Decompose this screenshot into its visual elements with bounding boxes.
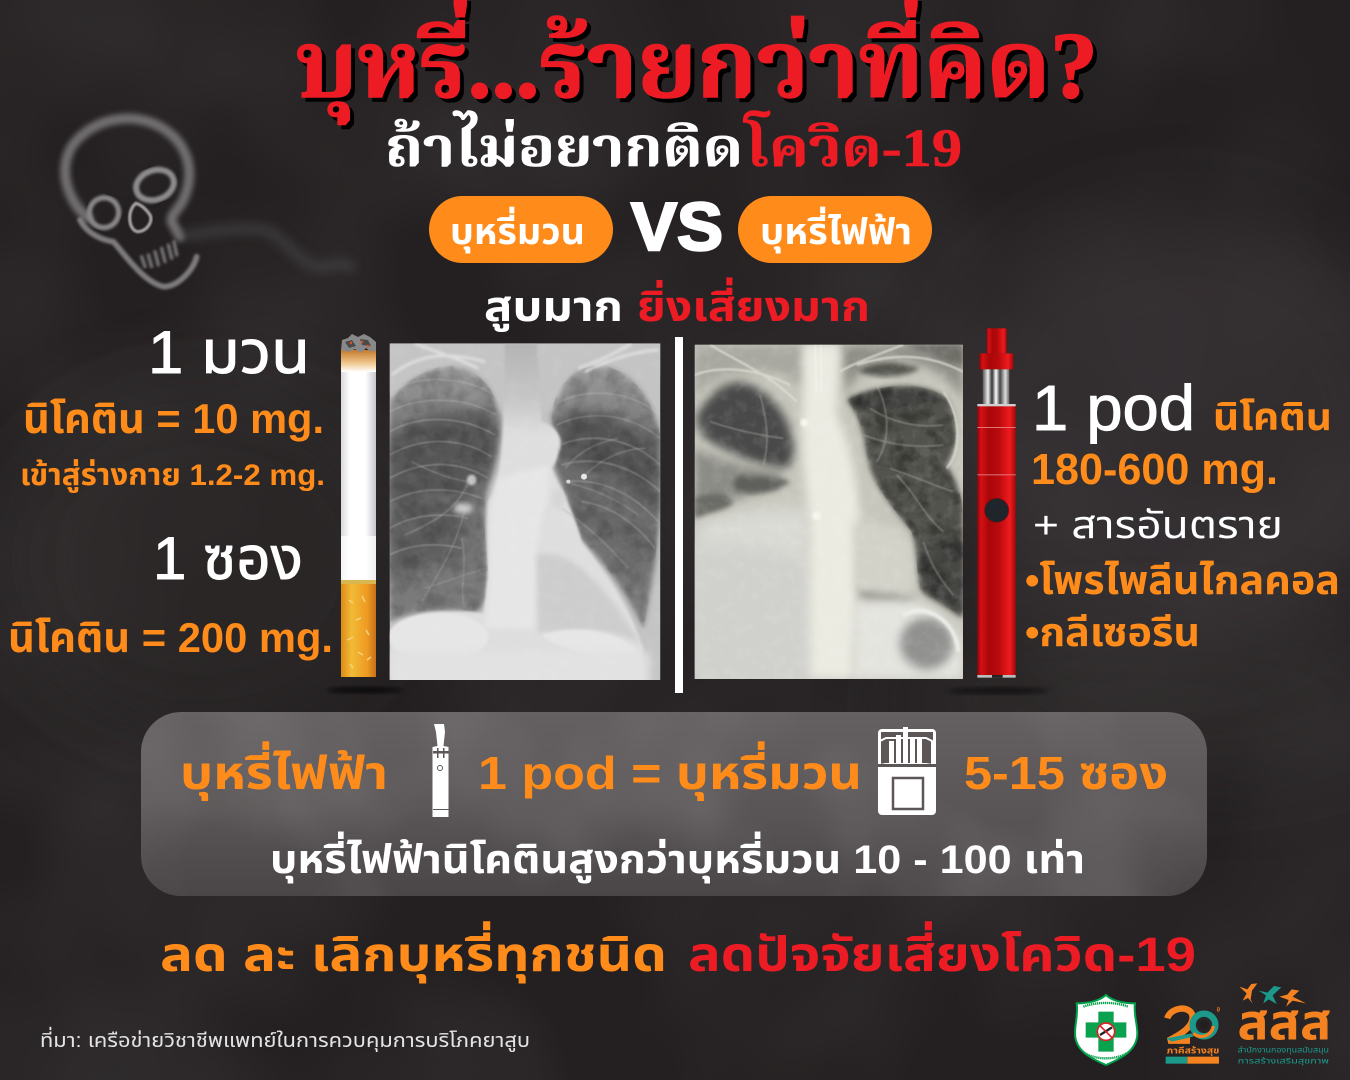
icon: red e-cigarette: [948, 328, 1048, 694]
logo: 20 years: ภาคีสร้างสุข: [1167, 1045, 1219, 1055]
subtitle: [385, 111, 962, 178]
call to action: ลด ละ เลิกบุหรี่ทุกชนิด: [160, 921, 667, 984]
pill: e-cigarette label: บุหรี่ไฟฟ้า: [760, 206, 912, 253]
pill: cigarette label: [429, 196, 613, 263]
logo: ThaiHealth: [1237, 983, 1331, 1065]
icon: white e-cigarette: [432, 724, 449, 817]
center divider: [675, 337, 683, 693]
propylene glycol: •โพรไพลีนไกลคอล: [1025, 559, 1340, 603]
vs: VS: [631, 189, 723, 265]
panel: comparison: [141, 712, 1207, 896]
glycerin: •กลีเซอรีน: [1025, 611, 1200, 655]
one pack heading: 1 ซอง: [153, 525, 303, 592]
logo: ThaiHealth: สำนักงานกองทุนสนับสนุน: [1238, 1046, 1329, 1055]
harmful substances: + สารอันตราย: [1033, 505, 1283, 547]
icon: cigarette: [327, 334, 403, 694]
smoke skull illustration: [65, 119, 350, 287]
panel: e-cigarette facts: [1025, 372, 1340, 655]
source: ที่มา: เครือข่ายวิชาชีพแพทย์ในการควบคุมการบริโภคยาสูบ: [40, 1026, 530, 1053]
pack count: 5-15 ซอง: [964, 747, 1168, 799]
pill: e-cigarette label: [738, 196, 932, 263]
nicotine absorbed: เข้าสู่ร่างกาย 1.2-2 mg.: [20, 459, 325, 493]
tagline: สูบมาก: [484, 283, 623, 332]
figures: [1239, 983, 1306, 1007]
e-cigarette label: บุหรี่ไฟฟ้า: [180, 741, 388, 801]
pill: cigarette label: บุหรี่มวน: [450, 206, 585, 253]
panel: cigarette facts: [8, 319, 333, 661]
nicotine per cigarette: นิโคติน = 10 mg.: [23, 395, 324, 442]
nicotine label: นิโคติน: [1213, 397, 1332, 439]
subtitle: ถ้าไม่อยากติด: [385, 111, 743, 178]
call to action: [160, 921, 1196, 984]
tagline: ยิ่งเสี่ยงมาก: [637, 277, 870, 330]
equation text: 1 pod = บุหรี่มวน: [478, 741, 862, 801]
call to action: ลดปัจจัยเสี่ยงโควิด-19: [688, 921, 1196, 982]
x-ray: damaged lungs: [695, 345, 963, 688]
title: บุหรี่...ร้ายกว่าที่คิด?: [295, 0, 1098, 125]
logo: 20 years: [1166, 1007, 1220, 1064]
nicotine amount: 180-600 mg.: [1031, 445, 1278, 494]
logo: ThaiHealth: สสส: [1237, 994, 1331, 1050]
tagline: [484, 277, 870, 332]
title: บุหรี่...ร้ายกว่าที่คิด?: [299, 1, 1102, 129]
icon: cigarette pack: [878, 727, 936, 815]
one pod heading: 1 pod: [1032, 372, 1195, 444]
logo: 20 years: ปี: [1216, 1007, 1220, 1014]
subtitle: โควิด-19: [743, 111, 962, 178]
logo: ThaiHealth: การสร้างเสริมสุขภาพ: [1238, 1055, 1330, 1065]
nicotine per pack: นิโคติน = 200 mg.: [8, 614, 333, 661]
one cigarette heading: 1 มวน: [148, 319, 310, 386]
x-ray: healthy lungs: [388, 343, 660, 688]
logo: no smoking shield: [1075, 995, 1137, 1065]
nicotine multiplier: บุหรี่ไฟฟ้านิโคตินสูงกว่าบุหรี่มวน 10 - 100 เท่า: [270, 831, 1085, 884]
